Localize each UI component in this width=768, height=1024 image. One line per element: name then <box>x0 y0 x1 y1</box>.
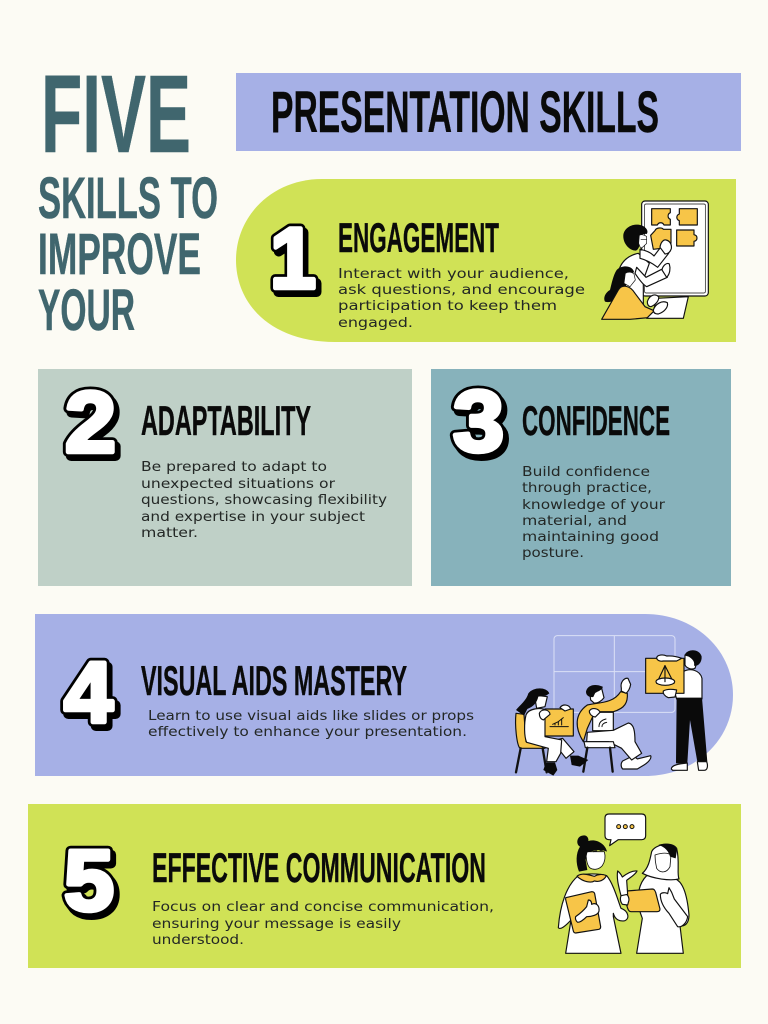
heading: effective communication: EFFECTIVE COMMUNICATION <box>152 844 486 891</box>
number 3: 3 <box>453 374 504 470</box>
icon: team presenting charts <box>516 636 707 776</box>
number 2: 2 <box>65 375 116 471</box>
title: five skills to improve your: YOUR <box>38 278 135 343</box>
text: adaptability description: Be prepared to adapt to <box>141 460 327 475</box>
text: effective communication description: ensuring your message is easily <box>152 917 401 932</box>
heading: visual aids mastery: VISUAL AIDS MASTERY <box>141 657 407 704</box>
text: confidence description: knowledge of your <box>522 498 666 513</box>
text: confidence description: through practice, <box>522 481 652 496</box>
number 3: 3 <box>456 378 507 474</box>
number 2: 2 <box>65 375 116 471</box>
title: five skills to improve your: FIVE <box>41 53 191 176</box>
icon: two people talking with speech bubble <box>558 814 689 953</box>
number 1: 1 <box>273 215 319 311</box>
text: effective communication description: understood. <box>152 933 244 948</box>
number 5: 5 <box>64 833 114 929</box>
number 1: 1 <box>270 211 316 307</box>
text: effective communication description <box>152 900 494 948</box>
panel: adaptability <box>38 369 412 586</box>
text: adaptability description: unexpected situations or <box>141 477 336 492</box>
text: visual aids description: Learn to use visual aids like slides or props <box>148 709 474 724</box>
heading: engagement: ENGAGEMENT <box>338 214 499 261</box>
title: five skills to improve your: IMPROVE <box>38 222 201 287</box>
text: engagement description: participation to keep them <box>338 299 557 314</box>
panel: engagement <box>236 179 736 342</box>
number 4: 4 <box>64 645 113 741</box>
text: adaptability description: and expertise in your subject <box>141 510 365 525</box>
text: visual aids description <box>148 709 474 740</box>
title: five skills to improve your: SKILLS TO <box>38 166 218 231</box>
text: engagement description: ask questions, and encourage <box>338 283 585 298</box>
number 5: 5 <box>64 833 114 929</box>
text: visual aids description: effectively to enhance your presentation. <box>148 725 467 740</box>
text: effective communication description: Focus on clear and concise communication, <box>152 900 494 915</box>
number 1: 1 <box>270 211 316 307</box>
number 4: 4 <box>64 645 113 741</box>
text: confidence description: material, and <box>522 514 627 529</box>
text: adaptability description <box>141 460 387 541</box>
text: adaptability description: questions, showcasing flexibility <box>141 493 387 508</box>
text: engagement description: Interact with your audience, <box>338 267 569 282</box>
text: engagement description <box>338 267 585 331</box>
heading: adaptability: ADAPTABILITY <box>141 397 311 444</box>
number 4: 4 <box>67 649 116 745</box>
text: confidence description: Build confidence <box>522 465 650 480</box>
text: adaptability description: matter. <box>141 526 198 541</box>
icon: people arranging puzzle on tablet <box>602 201 708 319</box>
text: engagement description: engaged. <box>338 316 413 331</box>
number 5: 5 <box>67 837 117 933</box>
number 3: 3 <box>453 374 504 470</box>
panel: visual aids mastery <box>35 614 733 776</box>
text: confidence description: posture. <box>522 546 584 561</box>
title: five skills to improve your <box>38 53 218 343</box>
text: confidence description <box>522 465 666 561</box>
number 2: 2 <box>68 379 119 475</box>
panel: confidence <box>431 369 731 586</box>
panel: effective communication <box>28 804 741 968</box>
text: confidence description: maintaining good <box>522 530 659 545</box>
